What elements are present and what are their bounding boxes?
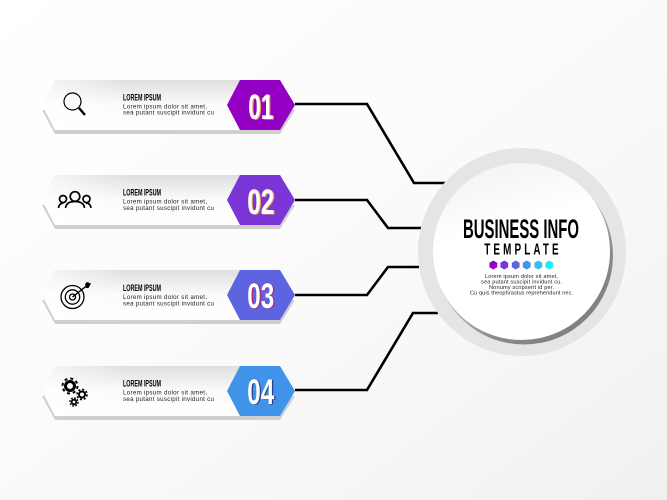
circle body text: Cu quis theophrastus reprehendunt nec. (470, 290, 573, 296)
icon: people (58, 192, 91, 208)
hexagon 03 (227, 270, 295, 320)
number 01: 01 (250, 88, 274, 128)
number 02: 02 (247, 183, 274, 222)
banner 2 (42, 175, 295, 229)
text block 4: sea putant suscipit invidunt cu (123, 396, 215, 403)
text block 4: Lorem ipsum dolor sit amet, (123, 390, 207, 396)
text block 3: LOREM IPSUM (123, 283, 161, 293)
text block 4 (123, 378, 215, 403)
number 01: 01 (248, 88, 273, 127)
subtitle: TEMPLATE (484, 240, 562, 258)
hexagon 02 (227, 175, 295, 225)
text block 3: sea putant suscipit invidunt cu (123, 300, 215, 308)
banner 1 (42, 80, 295, 134)
connector lines (295, 104, 446, 390)
text block 1: Lorem ipsum dolor sit amet, (123, 103, 207, 110)
text block 1: LOREM IPSUM (123, 92, 161, 102)
banner 4 (42, 366, 295, 420)
number 04: 04 (248, 374, 276, 412)
number 01 (248, 88, 274, 128)
circle body text: sea putant suscipit invidunt cu. (481, 280, 562, 286)
circle body text: Nonumy scripserit id per. (489, 285, 554, 291)
number 03: 03 (248, 278, 276, 316)
central circle (418, 148, 626, 356)
text block 2: Lorem ipsum dolor sit amet, (123, 198, 207, 206)
text block 2 (123, 188, 215, 212)
text block 2: LOREM IPSUM (123, 188, 161, 198)
icon: gears (62, 378, 87, 406)
icon: magnifier (64, 93, 85, 115)
colour hexagon dots (489, 260, 553, 270)
hexagon 01 (227, 80, 295, 130)
title: BUSINESS INFO (463, 214, 579, 244)
number 03: 03 (247, 277, 274, 316)
circle body text: Lorem ipsum dolor sit amet, (485, 274, 558, 280)
number 02: 02 (248, 184, 276, 222)
text block 1 (123, 92, 215, 116)
text block 1: sea putant suscipit invidunt cu (123, 110, 215, 116)
banner 3 (42, 270, 295, 324)
text block 4: LOREM IPSUM (123, 378, 161, 388)
icon: target (61, 282, 91, 308)
hexagon 04 (227, 366, 295, 416)
text block 3: Lorem ipsum dolor sit amet, (123, 294, 207, 301)
text block 3 (123, 283, 215, 308)
text block 2: sea putant suscipit invidunt cu (123, 205, 215, 212)
circle body text (470, 274, 573, 296)
number 04: 04 (247, 373, 275, 412)
